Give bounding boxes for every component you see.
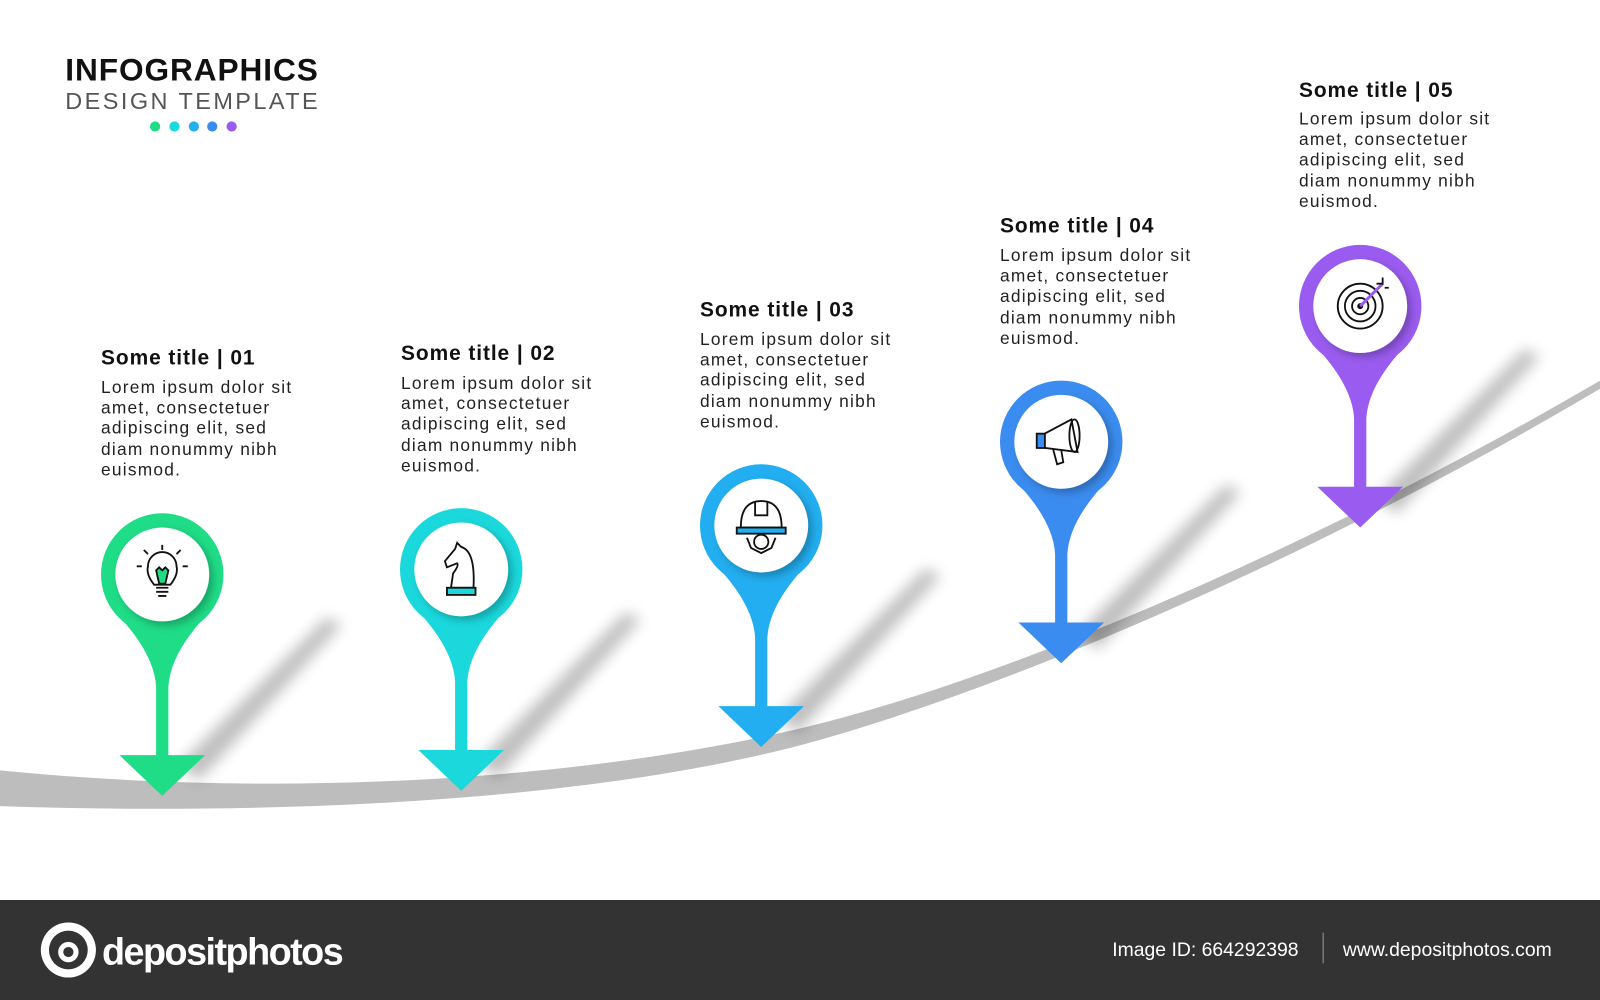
step 01: adipiscing elit, sed [101,418,267,438]
pin 01 [101,513,223,796]
step 01: diam nonummy nibh [101,439,278,459]
step 02: diam nonummy nibh [401,435,578,455]
step 01: Lorem ipsum dolor sit [101,377,292,397]
step 01: euismod. [101,460,181,480]
footer bar: www.depositphotos.com [1342,939,1552,961]
icon: megaphone [1037,419,1080,464]
logo [41,922,343,978]
step 04: Lorem ipsum dolor sit [1000,245,1191,265]
step 02 [400,342,592,791]
step 01 [101,346,292,796]
icon: bulb [137,545,188,596]
pin 04 [1000,381,1122,663]
step 04 [1000,215,1191,663]
image id: Image ID: 664292398 [1112,939,1299,961]
icon: helmet gear [737,501,786,553]
icon: target [1338,278,1389,329]
step 02: adipiscing elit, sed [401,414,567,434]
step 05: adipiscing elit, sed [1299,149,1465,169]
pin 03 [700,464,822,747]
step 03 [700,298,891,747]
step 03: adipiscing elit, sed [700,370,866,390]
icon: chess knight [445,543,476,595]
step 03: diam nonummy nibh [700,391,877,411]
step 04: euismod. [1000,328,1080,348]
step 04: diam nonummy nibh [1000,307,1177,327]
shadows [179,349,1540,781]
step 02: amet, consectetuer [401,393,570,413]
title [65,52,320,132]
logo: depositphotos [102,930,343,972]
pin 02 [400,508,522,791]
step 03: Some title | 03 [700,298,854,321]
step 05 [1299,79,1490,528]
step 01: amet, consectetuer [101,397,270,417]
step 05: Lorem ipsum dolor sit [1299,108,1490,128]
step 05: euismod. [1299,191,1379,211]
step 03: Lorem ipsum dolor sit [700,329,891,349]
road curve [0,381,1600,809]
step 03: amet, consectetuer [700,349,869,369]
pin 05 [1299,245,1421,528]
step 02: Some title | 02 [401,342,555,365]
step 02: Lorem ipsum dolor sit [401,373,592,393]
step 04: adipiscing elit, sed [1000,286,1166,306]
step 04: amet, consectetuer [1000,266,1169,286]
step 05: amet, consectetuer [1299,129,1468,149]
title: INFOGRAPHICS [65,52,319,88]
step 05: diam nonummy nibh [1299,171,1476,191]
step 02: euismod. [401,455,481,475]
step 04: Some title | 04 [1000,215,1154,238]
footer bar [0,900,1600,1000]
step 03: euismod. [700,412,780,432]
title: DESIGN TEMPLATE [65,88,320,114]
step 01: Some title | 01 [101,346,255,369]
step 05: Some title | 05 [1299,79,1453,102]
